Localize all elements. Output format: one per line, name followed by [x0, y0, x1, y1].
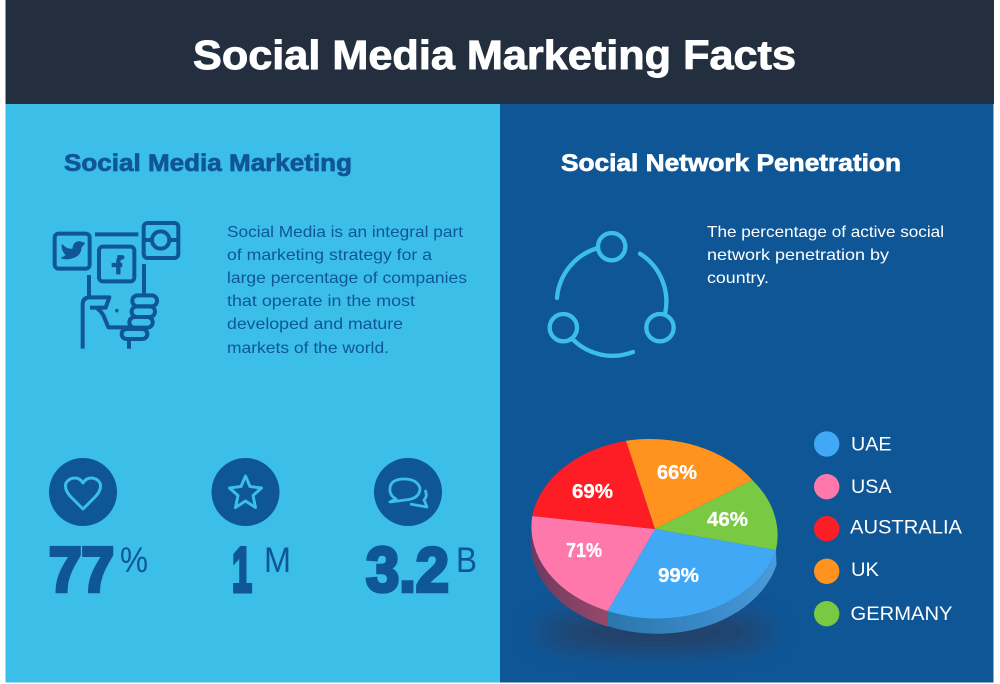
legend: UK [851, 560, 879, 581]
text block: network description: network penetration by [707, 247, 889, 264]
icon: hand holding social media signs [55, 223, 178, 349]
pie chart: 69% [572, 480, 613, 503]
pie chart: 46% [707, 508, 748, 531]
legend: AUSTRALIA [850, 518, 962, 538]
pie chart: 71% [566, 539, 602, 562]
stat: 77 percent [49, 458, 148, 606]
icon: network circles [550, 233, 674, 356]
pie chart [531, 439, 778, 648]
stat: 77 percent: 77 [49, 536, 114, 606]
stat: 1 million [212, 458, 291, 606]
legend: USA [851, 477, 892, 498]
pie chart: 99% [658, 564, 699, 587]
legend: GERMANY [850, 604, 953, 625]
text block: network description: The percentage of active social [707, 224, 944, 241]
stat: 3.2 billion [366, 458, 477, 606]
text block: social media description: large percentage of companies [227, 270, 467, 287]
title: Social Media Marketing Facts [193, 32, 796, 78]
text block: social media description: that operate in the most [227, 293, 416, 310]
legend: UAE [851, 434, 892, 456]
stat: 3.2 billion: 3.2 [366, 536, 449, 606]
header band [6, 0, 994, 104]
heading: Social Network Penetration: Social Network Penetration [561, 150, 901, 177]
text block: social media description: of marketing strategy for a [227, 247, 432, 264]
text block: network description: country. [707, 270, 769, 287]
stat: 1 million: M [264, 541, 291, 580]
text block: social media description: markets of the world. [227, 340, 389, 357]
text block: network description [707, 224, 944, 287]
pie chart: 66% [657, 461, 697, 484]
text block: social media description: developed and mature [227, 316, 403, 333]
stat: 1 million: 1 [232, 536, 252, 606]
text block: social media description [227, 224, 467, 357]
panel: right background [500, 104, 994, 682]
legend [814, 431, 962, 626]
stat: 3.2 billion: B [456, 541, 477, 580]
panel: left background [6, 104, 500, 682]
stat: 77 percent: % [120, 541, 148, 580]
text block: social media description: Social Media is an integral part [227, 224, 464, 241]
heading: Social Media Marketing: Social Media Marketing [64, 150, 352, 177]
